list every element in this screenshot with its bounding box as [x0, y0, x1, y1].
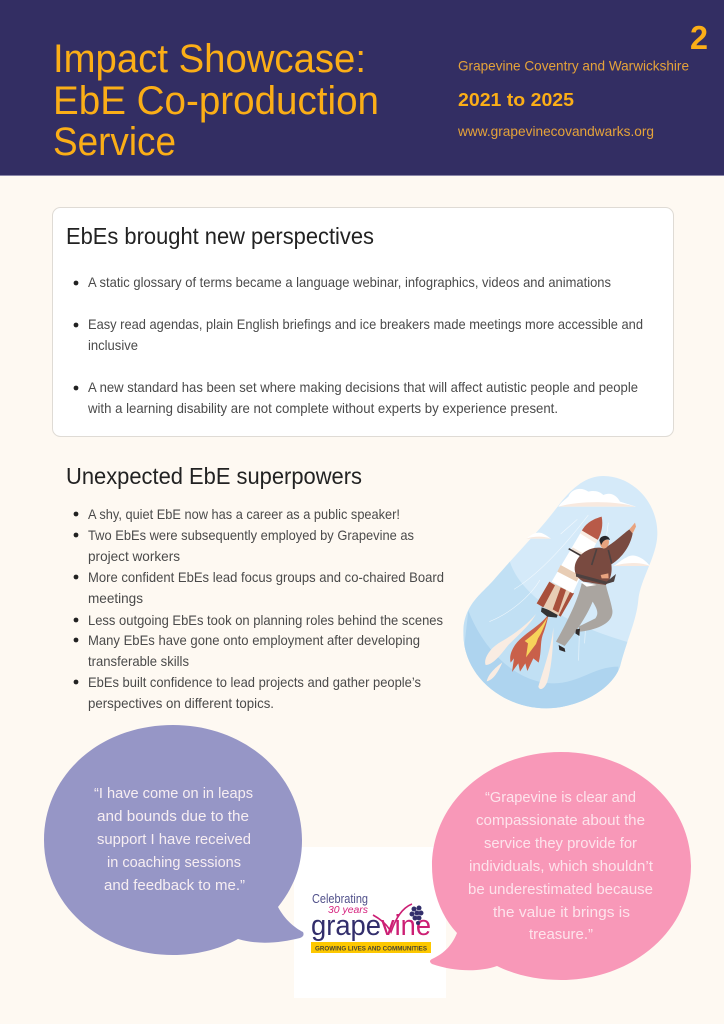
flame: [510, 614, 549, 672]
bullet list: superpowers: project workers: [88, 548, 180, 564]
bullet list: superpowers: Many EbEs have gone onto employment after developing: [88, 632, 420, 648]
quote text: pink: the value it brings is: [493, 904, 630, 921]
quote text: purple: in coaching sessions: [107, 854, 241, 871]
logo: grapevine wordmark: [311, 910, 431, 942]
logo: celebrating text: Celebrating: [312, 892, 368, 906]
bullet list: perspectives: A static glossary of terms became a language webinar, infographics, videos and animations: [88, 274, 611, 290]
panel: new perspectives: [52, 208, 674, 436]
quote text: purple: and bounds due to the: [97, 808, 249, 825]
illustration: person flying with rocket: [463, 476, 658, 708]
header band: [0, 0, 724, 176]
logo panel: [294, 847, 446, 998]
quote bubble: purple: [44, 725, 304, 955]
logo: tagline bar: [311, 942, 431, 953]
quote text: pink: compassionate about the: [476, 812, 645, 829]
bullet list: superpowers: Two EbEs were subsequently employed by Grapevine as: [88, 527, 414, 543]
bullet list: superpowers: [74, 506, 444, 711]
rocket: [537, 517, 602, 618]
heading: new perspectives: EbEs brought new perspectives: [66, 223, 374, 249]
quote text: purple: [94, 785, 253, 894]
bullet list: perspectives: with a learning disability are not complete without experts by experience present.: [87, 400, 558, 416]
logo: grapevine wordmark: grape: [311, 910, 381, 942]
organisation name: Grapevine Coventry and Warwickshire: [458, 58, 689, 74]
heading: superpowers: Unexpected EbE superpowers: [66, 463, 362, 489]
speed lines: [489, 515, 608, 661]
bullet list: perspectives: [74, 274, 643, 416]
quote text: pink: “Grapevine is clear and: [485, 789, 636, 806]
quote bubble: pink: [430, 752, 691, 980]
person: [556, 523, 636, 652]
quote text: pink: service they provide for: [484, 835, 637, 852]
quote text: purple: support I have received: [97, 831, 251, 848]
quote text: purple: “I have come on in leaps: [94, 785, 253, 802]
quote text: purple: and feedback to me.”: [104, 877, 245, 894]
quote text: pink: treasure.”: [529, 926, 593, 943]
quote text: pink: be underestimated because: [468, 881, 653, 898]
quote text: pink: individuals, which shouldn’t: [469, 858, 654, 875]
bullet list: perspectives: A new standard has been set where making decisions that will affect autistic people and people: [88, 379, 638, 395]
logo: grapevine wordmark: vine: [381, 910, 431, 942]
smoke: [485, 614, 553, 689]
logo: tagline bar: GROWING LIVES AND COMMUNITIES: [315, 946, 427, 952]
quote text: pink: [468, 789, 654, 943]
bullet list: superpowers: A shy, quiet EbE now has a career as a public speaker!: [88, 506, 400, 522]
logo: 30 years: 30 years: [328, 905, 368, 916]
bullet list: superpowers: perspectives on different topics.: [88, 695, 274, 711]
bullet list: superpowers: More confident EbEs lead focus groups and co-chaired Board: [88, 569, 444, 585]
clouds: [526, 489, 650, 566]
title: [53, 37, 379, 164]
bullet list: superpowers: meetings: [88, 590, 143, 606]
bullet list: perspectives: inclusive: [88, 337, 138, 353]
title: Impact Showcase:: [53, 37, 366, 81]
page number: 2: [690, 19, 708, 56]
blob background: [463, 476, 658, 708]
title: Service: [53, 120, 176, 164]
logo: vine swoosh and grapes: [373, 904, 424, 932]
date range: 2021 to 2025: [458, 89, 574, 110]
website: www.grapevinecovandwarks.org: [457, 123, 654, 139]
bullet list: superpowers: Less outgoing EbEs took on planning roles behind the scenes: [88, 612, 443, 628]
bullet list: perspectives: Easy read agendas, plain English briefings and ice breakers made meetings more accessible and: [88, 316, 643, 332]
title: EbE Co-production: [53, 79, 379, 123]
bullet list: superpowers: EbEs built confidence to lead projects and gather people’s: [88, 674, 421, 690]
bullet list: superpowers: transferable skills: [88, 653, 189, 669]
